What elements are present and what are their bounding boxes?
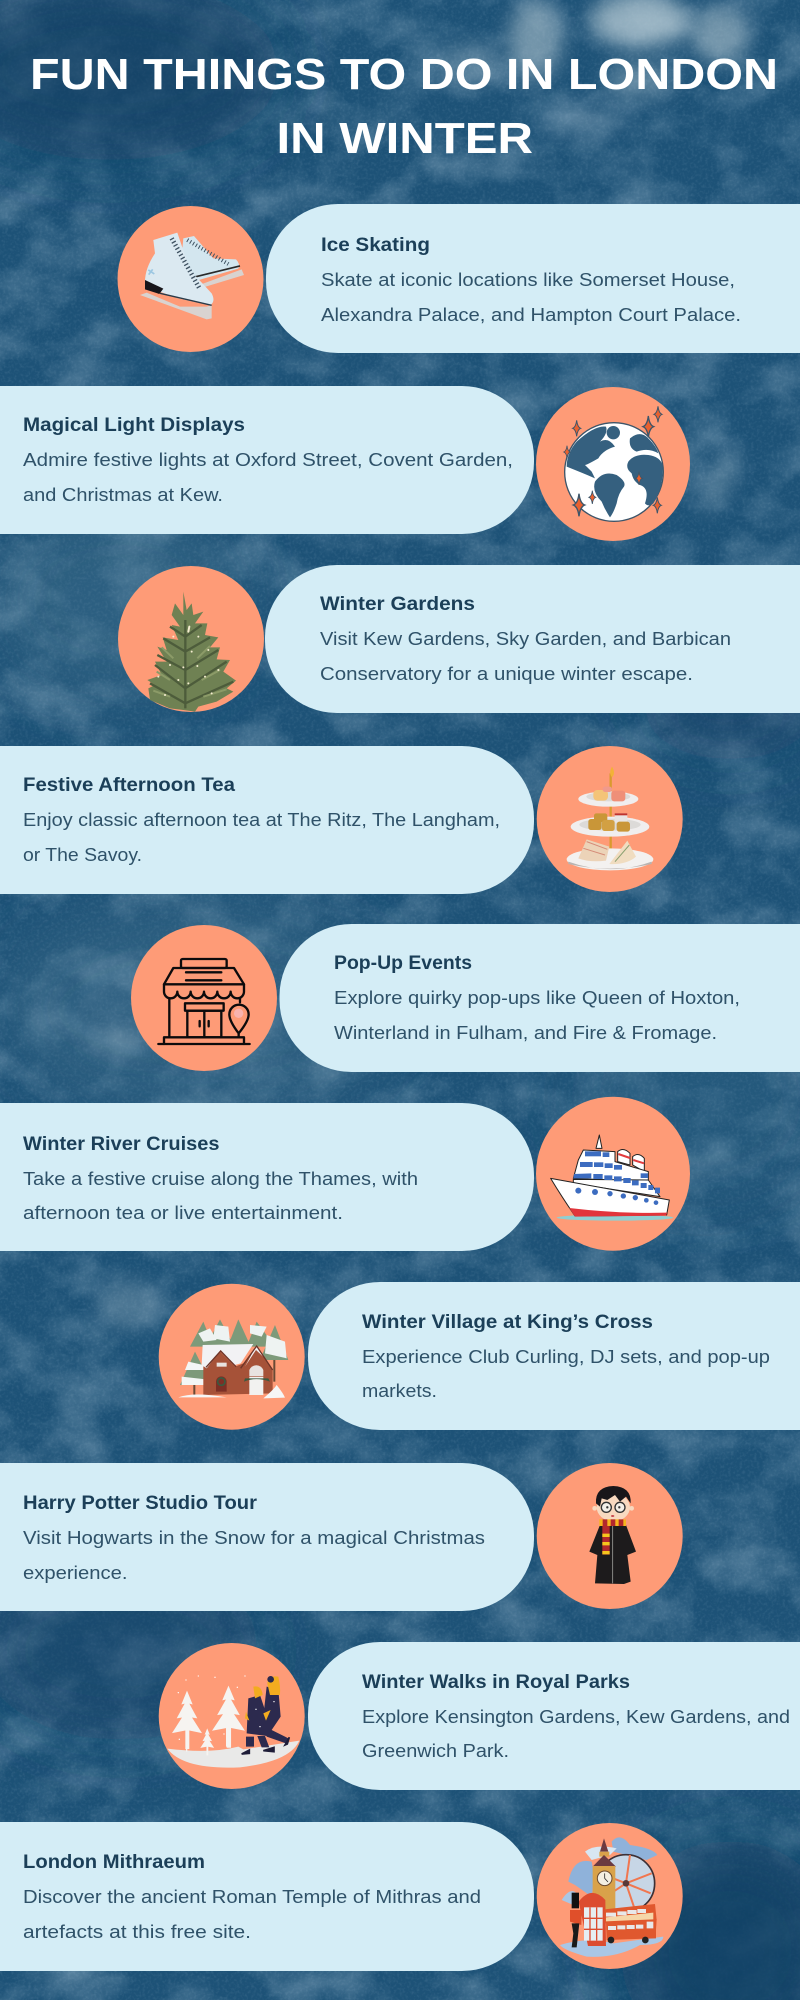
pill: magical light displays bbox=[0, 386, 534, 534]
icon: couple walking in snowy park bbox=[159, 1643, 305, 1789]
icon: afternoon tea stand bbox=[537, 746, 683, 892]
panel: harry potter studio tour bbox=[0, 1463, 683, 1611]
text: magical light displays bbox=[23, 414, 513, 505]
text: winter river cruises: Winter River Cruises bbox=[23, 1133, 220, 1155]
panel: magical light displays bbox=[0, 386, 690, 541]
panel: winter walks in royal parks bbox=[159, 1642, 800, 1790]
title bbox=[30, 50, 778, 163]
text: winter walks in royal parks: Winter Walks in Royal Parks bbox=[362, 1671, 630, 1693]
panel: london mithraeum bbox=[0, 1822, 683, 1971]
icon: london landmarks collage bbox=[537, 1823, 683, 1969]
pill: london mithraeum bbox=[0, 1822, 534, 1971]
text: harry potter studio tour: Harry Potter Studio Tour bbox=[23, 1492, 257, 1514]
panel: festive afternoon tea bbox=[0, 746, 683, 894]
pill: winter river cruises bbox=[0, 1103, 534, 1251]
text: winter walks in royal parks bbox=[362, 1671, 790, 1761]
text: magical light displays: and Christmas at Kew. bbox=[23, 484, 223, 505]
text: pop-up events bbox=[334, 952, 740, 1043]
text: winter village at king's cross: markets. bbox=[362, 1380, 437, 1401]
icon: harry potter figure bbox=[537, 1463, 683, 1609]
text: magical light displays: Admire festive lights at Oxford Street, Covent Garden, bbox=[23, 449, 513, 470]
pill: festive afternoon tea bbox=[0, 746, 534, 894]
text: winter village at king's cross: Winter Village at King’s Cross bbox=[362, 1311, 653, 1333]
text: harry potter studio tour bbox=[23, 1492, 485, 1583]
panel: winter gardens bbox=[118, 565, 800, 713]
pill: winter gardens bbox=[265, 565, 800, 713]
text: winter gardens bbox=[320, 593, 731, 684]
pill: winter village at king's cross bbox=[308, 1282, 800, 1430]
text: harry potter studio tour: Visit Hogwarts in the Snow for a magical Christmas bbox=[23, 1527, 485, 1548]
pill: ice skating bbox=[266, 204, 800, 353]
text: harry potter studio tour: experience. bbox=[23, 1562, 128, 1583]
text: winter river cruises: Take a festive cruise along the Thames, with bbox=[23, 1168, 418, 1189]
text: festive afternoon tea: Enjoy classic afternoon tea at The Ritz, The Langham, bbox=[23, 809, 500, 830]
text: winter gardens: Visit Kew Gardens, Sky Garden, and Barbican bbox=[320, 628, 731, 649]
text: winter village at king's cross bbox=[362, 1311, 770, 1401]
text: festive afternoon tea bbox=[23, 774, 500, 865]
pill: winter walks in royal parks bbox=[308, 1642, 800, 1790]
text: london mithraeum: London Mithraeum bbox=[23, 1851, 205, 1873]
text: winter river cruises bbox=[23, 1133, 418, 1223]
text: pop-up events: Winterland in Fulham, and Fire & Fromage. bbox=[334, 1022, 717, 1043]
pill: harry potter studio tour bbox=[0, 1463, 534, 1611]
title: FUN THINGS TO DO IN LONDON bbox=[30, 50, 778, 99]
panel: winter village at king's cross bbox=[159, 1282, 800, 1430]
text: magical light displays: Magical Light Displays bbox=[23, 414, 245, 436]
icon: christmas tree bbox=[118, 566, 264, 712]
panel: winter river cruises bbox=[0, 1097, 690, 1251]
pill: pop-up events bbox=[280, 924, 800, 1072]
text: london mithraeum bbox=[23, 1851, 481, 1942]
text: winter walks in royal parks: Greenwich Park. bbox=[362, 1740, 509, 1761]
text: winter village at king's cross: Experience Club Curling, DJ sets, and pop-up bbox=[362, 1346, 770, 1367]
panel: pop-up events bbox=[131, 924, 800, 1072]
icon: globe with sparkles bbox=[536, 387, 690, 541]
title: IN WINTER bbox=[276, 114, 533, 163]
text: winter river cruises: afternoon tea or live entertainment. bbox=[23, 1202, 343, 1223]
text: ice skating: Skate at iconic locations like Somerset House, bbox=[321, 269, 735, 290]
text: ice skating bbox=[321, 234, 741, 325]
text: london mithraeum: Discover the ancient Roman Temple of Mithras and bbox=[23, 1886, 481, 1907]
text: festive afternoon tea: or The Savoy. bbox=[23, 844, 142, 865]
panel: ice skating bbox=[118, 204, 800, 353]
text: ice skating: Alexandra Palace, and Hampton Court Palace. bbox=[321, 304, 741, 325]
text: pop-up events: Pop-Up Events bbox=[334, 952, 472, 974]
text: ice skating: Ice Skating bbox=[321, 234, 430, 256]
icon: ice skates bbox=[118, 206, 264, 352]
icon: snowy house bbox=[159, 1284, 305, 1430]
text: festive afternoon tea: Festive Afternoon Tea bbox=[23, 774, 235, 796]
icon: pop-up shop bbox=[131, 925, 277, 1071]
text: pop-up events: Explore quirky pop-ups like Queen of Hoxton, bbox=[334, 987, 740, 1008]
icon: cruise ship bbox=[536, 1097, 690, 1251]
text: winter gardens: Winter Gardens bbox=[320, 593, 475, 615]
text: london mithraeum: artefacts at this free site. bbox=[23, 1921, 251, 1942]
text: winter gardens: Conservatory for a unique winter escape. bbox=[320, 663, 693, 684]
text: winter walks in royal parks: Explore Kensington Gardens, Kew Gardens, and bbox=[362, 1706, 790, 1727]
